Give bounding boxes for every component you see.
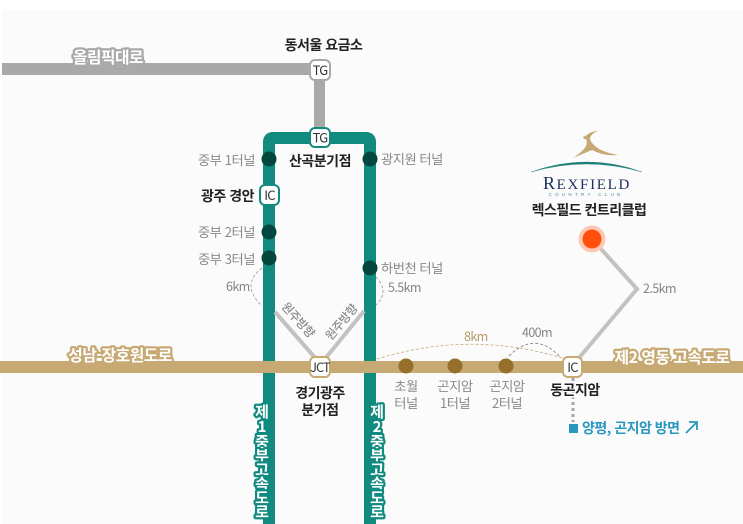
label: Wonju direction right: 원주방향	[321, 300, 361, 344]
road label: Jungbu 1 vertical: 속	[255, 473, 269, 494]
distance arc: 5.5km	[376, 277, 383, 305]
logo wordmark: REXFIELD	[543, 173, 631, 193]
road label: Jungbu 1 vertical: 부	[255, 445, 269, 466]
road label: Jungbu 2 vertical: 부	[370, 445, 384, 466]
road label: Jungbu 2 vertical: 2	[373, 416, 382, 437]
dotted connector to Yangpyeong	[572, 378, 574, 422]
label: Sangok junction: 산곡분기점	[289, 151, 351, 171]
distance arc: 400m	[509, 343, 560, 357]
labels: tunnels east: 광지원 터널	[381, 149, 443, 168]
label: Wonju direction left: 원주방향	[278, 298, 319, 341]
label: 2.5km: 2.5km	[643, 278, 676, 297]
road: Olympic-daero	[2, 63, 325, 134]
label: Donggonjiam: 동곤지암	[550, 380, 600, 400]
road label: Jungbu 1 vertical: 제	[255, 401, 269, 422]
labels: tunnels west: 중부 3터널	[198, 249, 255, 268]
label: Gonjiam tunnel 2	[489, 376, 525, 412]
logo arc	[531, 162, 642, 172]
road label: Jungbu 2 vertical: 고	[370, 459, 384, 480]
destination marker	[578, 226, 606, 252]
road label: Jungbu 1 vertical: 고	[255, 459, 269, 480]
badge: TG junction: TG	[313, 128, 327, 146]
label: 5.5km: 5.5km	[388, 277, 421, 296]
road: Jungbu expressways	[269, 138, 370, 524]
label: Gyeonggi Gwangju junction: 분기점	[301, 400, 339, 420]
label: Gonjiam tunnel 1: 1터널	[440, 393, 470, 412]
label: 6km: 6km	[226, 276, 250, 295]
direction: Yangpyeong, Gonjiam: 양평, 곤지암 방면	[582, 418, 680, 438]
label: Gyeonggi Gwangju junction	[295, 383, 345, 420]
label: Rexfield CC: 렉스필드 컨트리클럽	[532, 200, 646, 220]
label: Gonjiam tunnel 2: 곤지암	[489, 376, 525, 395]
label: Gwangju Gyeongan: 광주 경안	[201, 186, 255, 206]
logo deer	[573, 131, 618, 158]
labels: tunnels west	[198, 150, 255, 268]
road label: Jungbu 1 vertical: 중	[255, 431, 269, 452]
label: Gonjiam tunnel 1: 곤지암	[437, 376, 473, 395]
road label: Jungbu 1 vertical	[255, 401, 269, 522]
connector lines to JCT	[275, 311, 364, 360]
distance arc: 6km	[251, 268, 262, 306]
label: Seongnam-Janghowon road: 성남-장호원도로	[68, 343, 172, 366]
label: Gonjiam tunnel 1	[437, 376, 473, 412]
labels: tunnels west: 중부 1터널	[198, 150, 255, 169]
logo: Rexfield Country Club	[531, 131, 642, 197]
road label: Jungbu 2 vertical: 중	[370, 431, 384, 452]
label: Olympic-daero: 올림픽대로	[73, 45, 143, 68]
road label: Jungbu 1 vertical: 로	[255, 501, 269, 522]
label: Yeongdong expressway: 제2 영동 고속도로	[615, 345, 729, 368]
road label: Jungbu 1 vertical: 도	[255, 487, 269, 508]
label: Chowol tunnel: 터널	[394, 393, 418, 412]
badge: IC Gwangju	[260, 185, 279, 205]
road label: Jungbu 2 vertical: 도	[370, 487, 384, 508]
distance arc: 8km	[377, 344, 562, 359]
road label: Jungbu 1 vertical: 1	[258, 416, 266, 437]
label: Chowol tunnel: 초월	[394, 376, 418, 395]
label: Gyeonggi Gwangju junction: 경기광주	[295, 383, 345, 403]
label: Dongseoul tollgate: 동서울 요금소	[285, 35, 363, 55]
badge: IC Donggonjiam	[563, 357, 582, 377]
badge: JCT: JCT	[310, 357, 331, 376]
label: 8km: 8km	[464, 326, 488, 345]
road label: Jungbu 2 vertical: 속	[370, 473, 384, 494]
labels: tunnels west: 중부 2터널	[198, 222, 255, 241]
road label: Jungbu 2 vertical: 로	[370, 501, 384, 522]
label: Gonjiam tunnel 2: 2터널	[492, 393, 522, 412]
connector line to Rexfield	[573, 239, 637, 365]
label: 400m: 400m	[522, 322, 552, 341]
label: Chowol tunnel	[394, 376, 418, 412]
badge: TG top: TG	[313, 60, 327, 79]
road label: Jungbu 2 vertical: 제	[370, 401, 384, 422]
logo subtitle: COUNTRY CLUB	[549, 192, 623, 197]
tunnel markers	[262, 152, 378, 276]
badge: IC Donggonjiam: IC	[567, 357, 578, 376]
road: Yeongdong expressway	[0, 361, 743, 373]
badge: IC Gwangju: IC	[264, 185, 275, 204]
labels: tunnels east: 하번천 터널	[381, 258, 443, 277]
road label: Jungbu 2 vertical	[370, 401, 384, 522]
tunnel markers on Yeongdong	[398, 358, 514, 374]
labels: tunnels east	[381, 149, 443, 277]
